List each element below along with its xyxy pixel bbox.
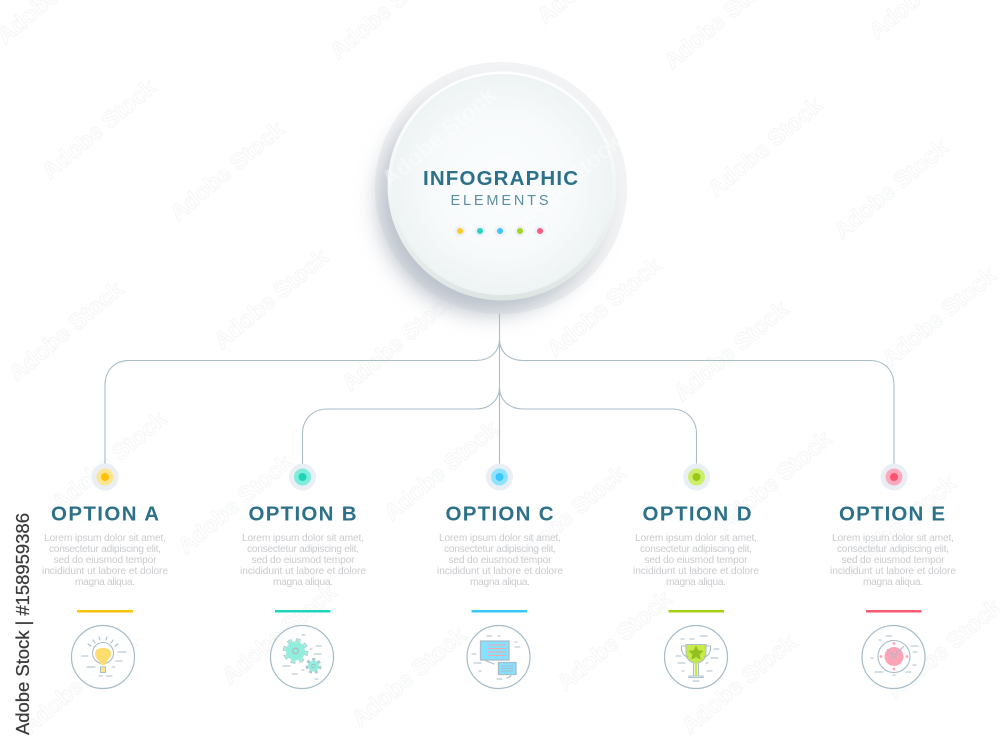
description B: sed do eiusmod tempor <box>252 555 355 566</box>
description A: sed do eiusmod tempor <box>54 555 157 566</box>
description B: Lorem ipsum dolor sit amet, <box>242 533 364 544</box>
heading C: OPTION C <box>446 502 554 526</box>
heading A: OPTION A <box>51 502 159 526</box>
accent bar E <box>866 610 922 612</box>
watermarks: Adobe Stock <box>877 261 1000 372</box>
node marker D <box>683 464 710 490</box>
column: option D <box>633 464 759 688</box>
description C: incididunt ut labore et dolore <box>437 566 563 577</box>
watermarks: Adobe Stock <box>837 469 961 580</box>
watermarks: Adobe Stock <box>703 91 827 202</box>
description A: incididunt ut labore et dolore <box>42 566 168 577</box>
description B: consectetur adipiscing elit, <box>247 544 359 555</box>
watermarks: Adobe Stock <box>165 115 289 226</box>
accent bar A <box>77 610 133 612</box>
watermarks: Adobe Stock <box>173 448 297 559</box>
watermarks: Adobe Stock <box>552 585 676 696</box>
description B: incididunt ut labore et dolore <box>240 566 366 577</box>
description C: consectetur adipiscing elit, <box>444 544 556 555</box>
description D <box>633 533 759 588</box>
description E: consectetur adipiscing elit, <box>837 544 949 555</box>
description C <box>437 533 563 588</box>
description D: Lorem ipsum dolor sit amet, <box>635 533 757 544</box>
description E: incididunt ut labore et dolore <box>830 566 956 577</box>
icon: light bulb <box>72 626 134 688</box>
watermarks: Adobe Stock <box>337 285 461 396</box>
watermarks: Adobe Stock <box>17 628 141 739</box>
column: option C <box>437 464 563 688</box>
node marker C <box>486 464 513 490</box>
description D: consectetur adipiscing elit, <box>640 544 752 555</box>
icon: trophy <box>664 626 728 688</box>
watermarks: Adobe Stock <box>677 628 801 739</box>
subtitle: ELEMENTS <box>450 193 548 209</box>
description D: sed do eiusmod tempor <box>644 555 748 566</box>
heading E: OPTION E <box>839 502 945 526</box>
accent bar B <box>275 610 330 612</box>
watermarks: Adobe Stock <box>379 415 503 526</box>
panel: central circle <box>375 62 627 314</box>
watermarks: Adobe Stock <box>542 251 666 362</box>
outer halo <box>375 62 627 314</box>
description E: magna aliqua. <box>863 577 923 588</box>
icon: target clock <box>862 626 925 688</box>
description E: sed do eiusmod tempor <box>842 555 945 566</box>
description A: consectetur adipiscing elit, <box>49 544 161 555</box>
disc watermarks: Adobe Stock <box>377 81 501 192</box>
accent bar C <box>472 610 527 612</box>
node marker B <box>289 464 316 490</box>
description C: sed do eiusmod tempor <box>448 555 552 566</box>
column: option E <box>830 464 956 688</box>
description A: magna aliqua. <box>75 577 135 588</box>
watermarks: Adobe Stock <box>4 275 128 386</box>
colour dots <box>454 226 546 236</box>
watermarks: Adobe Stock <box>507 459 631 570</box>
description C: magna aliqua. <box>470 577 530 588</box>
disc rim <box>388 72 616 300</box>
column: option A <box>42 464 168 688</box>
disc face <box>392 74 612 295</box>
stock credit: Adobe Stock | #158959386 <box>12 513 33 735</box>
description C: Lorem ipsum dolor sit amet, <box>439 533 561 544</box>
watermarks: Adobe Stock <box>712 425 836 536</box>
description D: incididunt ut labore et dolore <box>633 566 759 577</box>
heading D: OPTION D <box>642 502 752 526</box>
watermarks: Adobe Stock <box>47 405 171 516</box>
accent bar D <box>668 610 724 612</box>
description E <box>830 533 956 588</box>
watermarks: Adobe Stock <box>209 243 333 354</box>
heading B: OPTION B <box>248 502 356 526</box>
disc shadow <box>378 90 602 314</box>
icon: gears <box>270 626 334 688</box>
description B: magna aliqua. <box>273 577 333 588</box>
watermarks: Adobe Stock <box>829 133 953 244</box>
watermarks: Adobe Stock <box>217 578 341 689</box>
node marker A <box>92 464 118 490</box>
disc watermarks: Adobe Stock <box>502 128 626 239</box>
watermarks: Adobe Stock <box>669 295 793 406</box>
watermarks: Adobe Stock <box>347 621 471 732</box>
column: option B <box>240 464 366 688</box>
node marker E <box>880 464 908 490</box>
watermarks: Adobe Stock <box>37 73 161 184</box>
title: INFOGRAPHIC <box>423 167 578 190</box>
icon: speech bubbles <box>467 626 530 688</box>
description A <box>42 533 168 588</box>
description E: Lorem ipsum dolor sit amet, <box>832 533 954 544</box>
disc watermarks <box>377 81 626 239</box>
connector lines <box>105 314 894 464</box>
description A: Lorem ipsum dolor sit amet, <box>44 533 166 544</box>
description B <box>240 533 366 588</box>
description D: magna aliqua. <box>666 577 726 588</box>
